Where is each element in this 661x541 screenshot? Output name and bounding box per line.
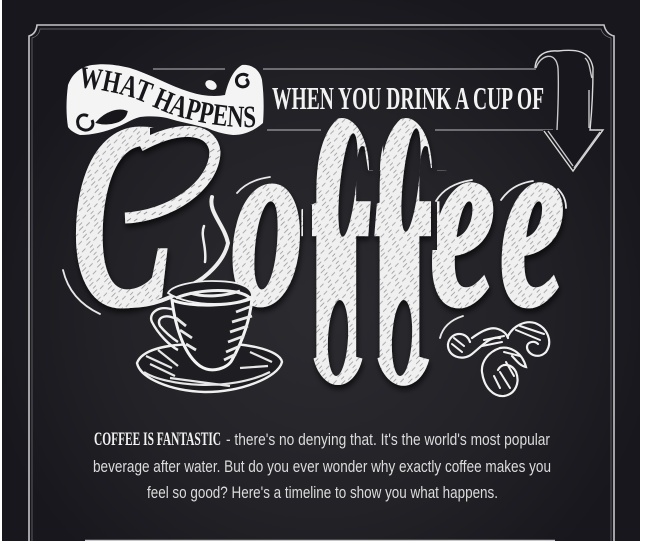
title word: Coffee: o	[232, 85, 303, 356]
title word: Coffee: e	[430, 82, 495, 358]
title word: Coffee: C	[72, 71, 175, 360]
title word: Coffee: f	[304, 48, 379, 461]
saucer	[137, 343, 282, 392]
paragraph line 2: beverage after water. But do you ever wonder why exactly coffee makes you	[93, 457, 551, 476]
banner flourish lower left	[78, 111, 126, 130]
paragraph line 1 bold lead: COFFEE IS FANTASTIC	[94, 429, 221, 450]
heading rules	[153, 69, 553, 130]
banner lettering: WHAT HAPPENS	[82, 67, 256, 128]
intro paragraph	[93, 429, 551, 502]
icon: steam	[130, 197, 228, 306]
icon: coffee cup	[137, 281, 282, 392]
icon: chalk arrow	[535, 50, 603, 171]
banner flourish upper right	[204, 70, 248, 95]
title word: Coffee: f	[368, 48, 442, 461]
chalk swashes	[63, 177, 566, 338]
banner: what happens	[66, 64, 264, 135]
icon: flourish	[448, 322, 549, 396]
cup handle	[151, 308, 178, 350]
title word: Coffee	[76, 118, 564, 391]
paragraph line 3: feel so good? Here's a timeline to show you what happens.	[147, 483, 498, 502]
swash extending the C	[125, 131, 215, 218]
title word: Coffee: e	[500, 82, 564, 358]
paragraph line 1: - there's no denying that. It's the world's most popular	[226, 430, 550, 449]
cup body	[172, 298, 252, 370]
